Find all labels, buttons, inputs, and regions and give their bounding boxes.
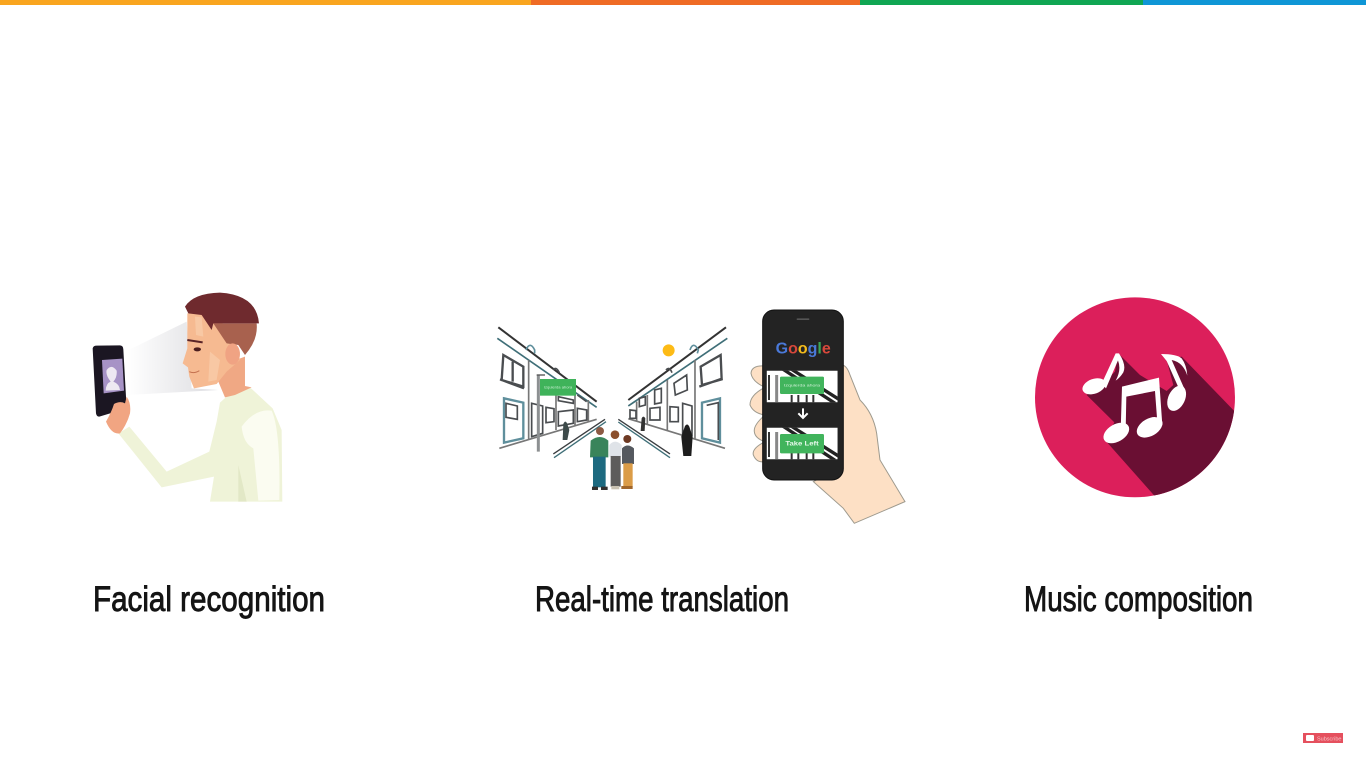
caption: music composition: Music composition	[1024, 580, 1253, 619]
upper street picture and sign	[766, 370, 838, 402]
right row of houses	[628, 327, 727, 448]
caption: real-time translation: Real-time translation	[535, 580, 789, 619]
illustration: man scanning his face with a phone	[93, 293, 282, 502]
arrow	[798, 408, 808, 418]
upper street picture and sign: Izquierda ahora	[784, 384, 821, 388]
Google logo: Google	[776, 341, 831, 358]
family of three	[590, 427, 634, 490]
sun	[663, 344, 675, 356]
distant figures	[563, 417, 693, 456]
icon: music notes in crimson circle	[1035, 297, 1235, 498]
kerbs	[553, 419, 670, 458]
street sign: Izquierda ahora	[544, 385, 573, 389]
left row of houses	[497, 327, 597, 448]
illustration: hand holding phone with Google translate	[750, 310, 905, 523]
illustration: street scene with sign and family	[497, 327, 727, 490]
top colour bar	[0, 0, 1366, 5]
lower street picture and sign	[766, 428, 838, 460]
phone body	[763, 310, 843, 480]
hand	[813, 365, 905, 523]
street sign	[537, 375, 576, 452]
subscribe badge	[1303, 733, 1343, 743]
caption: facial recognition: Facial recognition	[93, 580, 325, 619]
lower street picture and sign: Take Left	[785, 440, 820, 447]
subscribe badge: Subscribe	[1317, 736, 1341, 742]
